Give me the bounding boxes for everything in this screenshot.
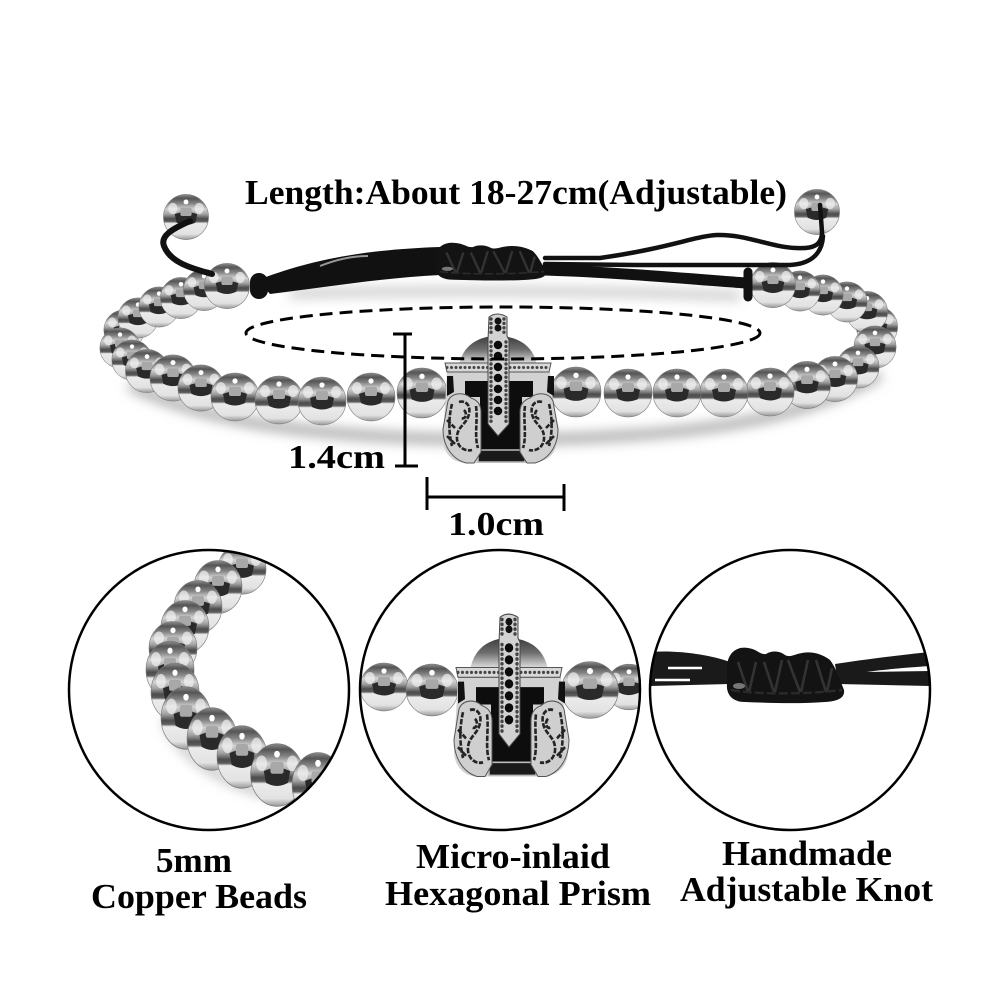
back left beads <box>104 263 250 350</box>
height label: 1.4cm <box>288 439 385 476</box>
width dimension line <box>427 477 564 511</box>
bracelet shadows <box>130 291 880 440</box>
caption: adjustable knot: Adjustable Knot <box>680 870 933 909</box>
detail circle: knot <box>650 550 930 830</box>
back right beads <box>750 262 898 348</box>
dashed ellipse: inner diameter <box>246 307 760 359</box>
caption: hexagonal prism: Micro-inlaid <box>416 837 611 876</box>
detail circle: copper beads <box>69 544 349 830</box>
knot <box>436 243 546 281</box>
detail circle: helmet <box>360 550 652 830</box>
height dimension line <box>393 334 418 466</box>
bracelet photo <box>100 189 898 463</box>
caption: adjustable knot: Handmade <box>722 834 892 873</box>
caption: hexagonal prism: Hexagonal Prism <box>385 874 651 913</box>
front beads right <box>551 326 896 417</box>
end ball right <box>794 189 840 235</box>
caption: copper beads: 5mm <box>156 841 232 880</box>
front beads left <box>100 328 447 425</box>
caption: adjustable knot <box>680 834 933 909</box>
caption: copper beads <box>91 841 307 916</box>
end ball left <box>163 194 209 240</box>
width label: 1.0cm <box>448 506 544 543</box>
title: Length:About 18-27cm(Adjustable) <box>245 173 787 212</box>
black cords <box>163 205 823 297</box>
caption: copper beads: Copper Beads <box>91 877 307 916</box>
caption: hexagonal prism <box>385 837 651 913</box>
helmet charm <box>443 314 558 463</box>
